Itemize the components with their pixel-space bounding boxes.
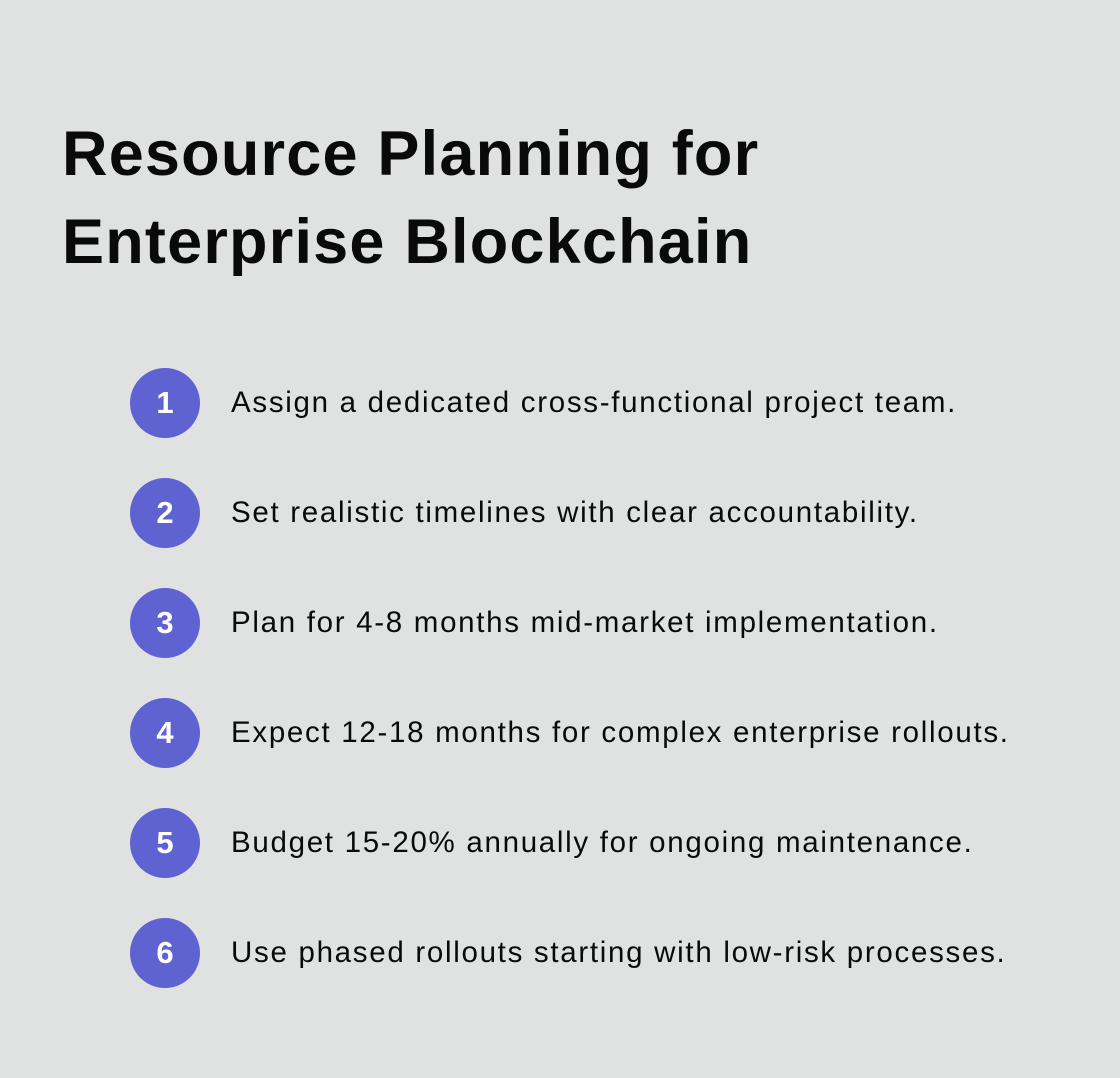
text 6: Use phased rollouts starting with low-risk processes. xyxy=(231,936,1006,969)
text 1: Assign a dedicated cross-functional project team. xyxy=(231,386,957,419)
item 1 xyxy=(130,368,957,438)
title: Resource Planning for xyxy=(62,119,759,189)
badge 4: 4 xyxy=(156,715,174,750)
item 5 xyxy=(130,808,973,878)
badge 1 xyxy=(130,368,200,438)
badge 6: 6 xyxy=(156,935,174,970)
badge 2 xyxy=(130,478,200,548)
text 3: Plan for 4-8 months mid-market implementation. xyxy=(231,606,939,639)
badge 5: 5 xyxy=(156,825,174,860)
badge 2: 2 xyxy=(156,495,174,530)
badge 5 xyxy=(130,808,200,878)
item 6 xyxy=(130,918,1006,988)
title: Enterprise Blockchain xyxy=(62,207,752,277)
text 5: Budget 15-20% annually for ongoing maintenance. xyxy=(231,826,973,859)
badge 3: 3 xyxy=(156,605,174,640)
text 2: Set realistic timelines with clear accountability. xyxy=(231,496,919,529)
title xyxy=(62,119,759,277)
item 4 xyxy=(130,698,1010,768)
badge 6 xyxy=(130,918,200,988)
badge 4 xyxy=(130,698,200,768)
badge 1: 1 xyxy=(156,385,174,420)
text 4: Expect 12-18 months for complex enterprise rollouts. xyxy=(231,716,1010,749)
item 2 xyxy=(130,478,919,548)
badge 3 xyxy=(130,588,200,658)
item 3 xyxy=(130,588,939,658)
